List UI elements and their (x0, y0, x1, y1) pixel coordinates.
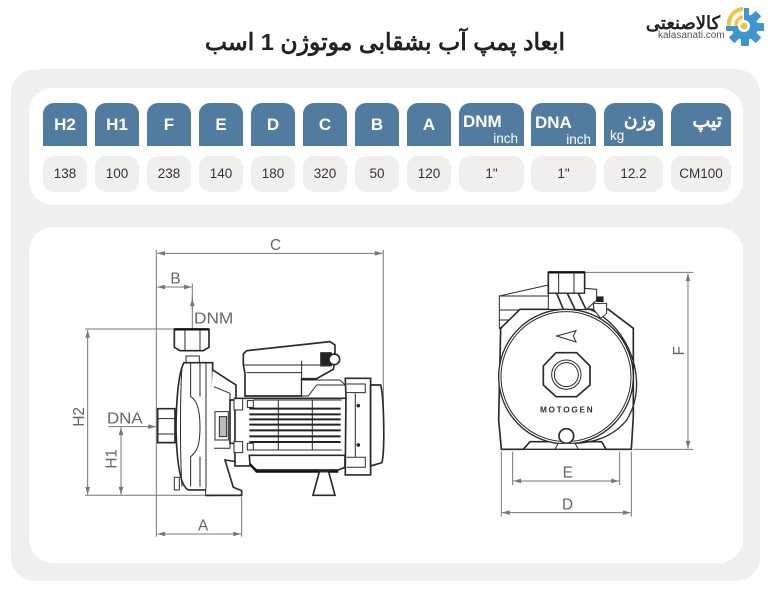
value DNA: 1" (557, 166, 570, 181)
pump front outline (499, 272, 637, 449)
value B (355, 156, 399, 192)
header DNM inch: inch (493, 131, 518, 146)
value H1 (95, 156, 139, 192)
value F: 238 (158, 166, 180, 181)
logo wordmark: کالاصنعتی (646, 13, 720, 33)
header type: تیپ (692, 111, 722, 132)
header C (303, 103, 347, 146)
value A (407, 156, 451, 192)
header C: C (319, 115, 331, 134)
dimension lines front view (501, 272, 693, 517)
dimension labels side view (71, 237, 281, 535)
header H1 (95, 103, 139, 146)
value type: CM100 (679, 166, 723, 181)
dimension labels side view: C (270, 237, 281, 254)
value DNM (459, 156, 524, 192)
table headers (43, 103, 731, 147)
value type (671, 156, 731, 192)
value E: 140 (210, 166, 232, 181)
logo url: kalasanati.com (658, 30, 725, 41)
header B (355, 103, 399, 146)
panel: dimensions table (29, 88, 743, 205)
logo: kalasanati (646, 7, 764, 46)
header D (251, 103, 295, 146)
header H1: H1 (106, 115, 128, 134)
dimension labels front view: E (563, 464, 573, 481)
dimension labels side view: A (198, 518, 209, 535)
header DNM inch (459, 103, 524, 146)
dimension labels side view: DNM (194, 310, 233, 327)
header weight kg: kg (610, 128, 624, 143)
panel: technical drawings (29, 227, 743, 563)
dimension labels front view: F (671, 346, 688, 355)
header F (147, 103, 191, 146)
header E (199, 103, 243, 146)
dimension labels side view: B (170, 270, 181, 287)
value B: 50 (369, 166, 385, 181)
header weight kg (604, 103, 663, 146)
value D: 180 (262, 166, 284, 181)
header weight kg: وزن (624, 110, 656, 131)
header DNM inch: DNM (463, 112, 502, 131)
value DNM: 1" (485, 166, 498, 181)
value C: 320 (314, 166, 336, 181)
header DNA inch: inch (566, 132, 591, 147)
value A: 120 (418, 166, 440, 181)
value weight: 12.2 (620, 166, 647, 181)
header E: E (215, 115, 227, 134)
value H1: 100 (106, 166, 128, 181)
value DNA (531, 156, 596, 192)
header H2 (43, 103, 87, 146)
header type (671, 103, 731, 146)
dimension labels front view: D (562, 496, 573, 513)
value F (147, 156, 191, 192)
value H2: 138 (54, 166, 76, 181)
header A: A (423, 115, 435, 134)
dimension labels side view: H2 (71, 407, 88, 427)
dimension labels side view: H1 (104, 449, 121, 469)
header F: F (164, 115, 174, 134)
dimension labels front view (562, 346, 688, 513)
header DNA inch (531, 103, 596, 146)
dimension labels side view: DNA (107, 410, 143, 427)
header H2: H2 (54, 115, 76, 134)
title: ابعاد پمپ آب بشقابی موتوژن 1 اسب (205, 29, 565, 55)
header A (407, 103, 451, 146)
value weight (604, 156, 663, 192)
value H2 (43, 156, 87, 192)
header DNA inch: DNA (535, 113, 572, 132)
pump side outline (158, 329, 384, 495)
header D: D (267, 115, 279, 134)
header B: B (371, 115, 383, 134)
side view drawing (71, 237, 384, 537)
front view drawing (499, 272, 693, 517)
logo icon: gear with signal (726, 7, 764, 46)
dimension lines side view (85, 250, 383, 537)
brand label: MOTOGEN (540, 405, 593, 415)
value C (303, 156, 347, 192)
value E (199, 156, 243, 192)
table values (43, 156, 731, 192)
value D (251, 156, 295, 192)
